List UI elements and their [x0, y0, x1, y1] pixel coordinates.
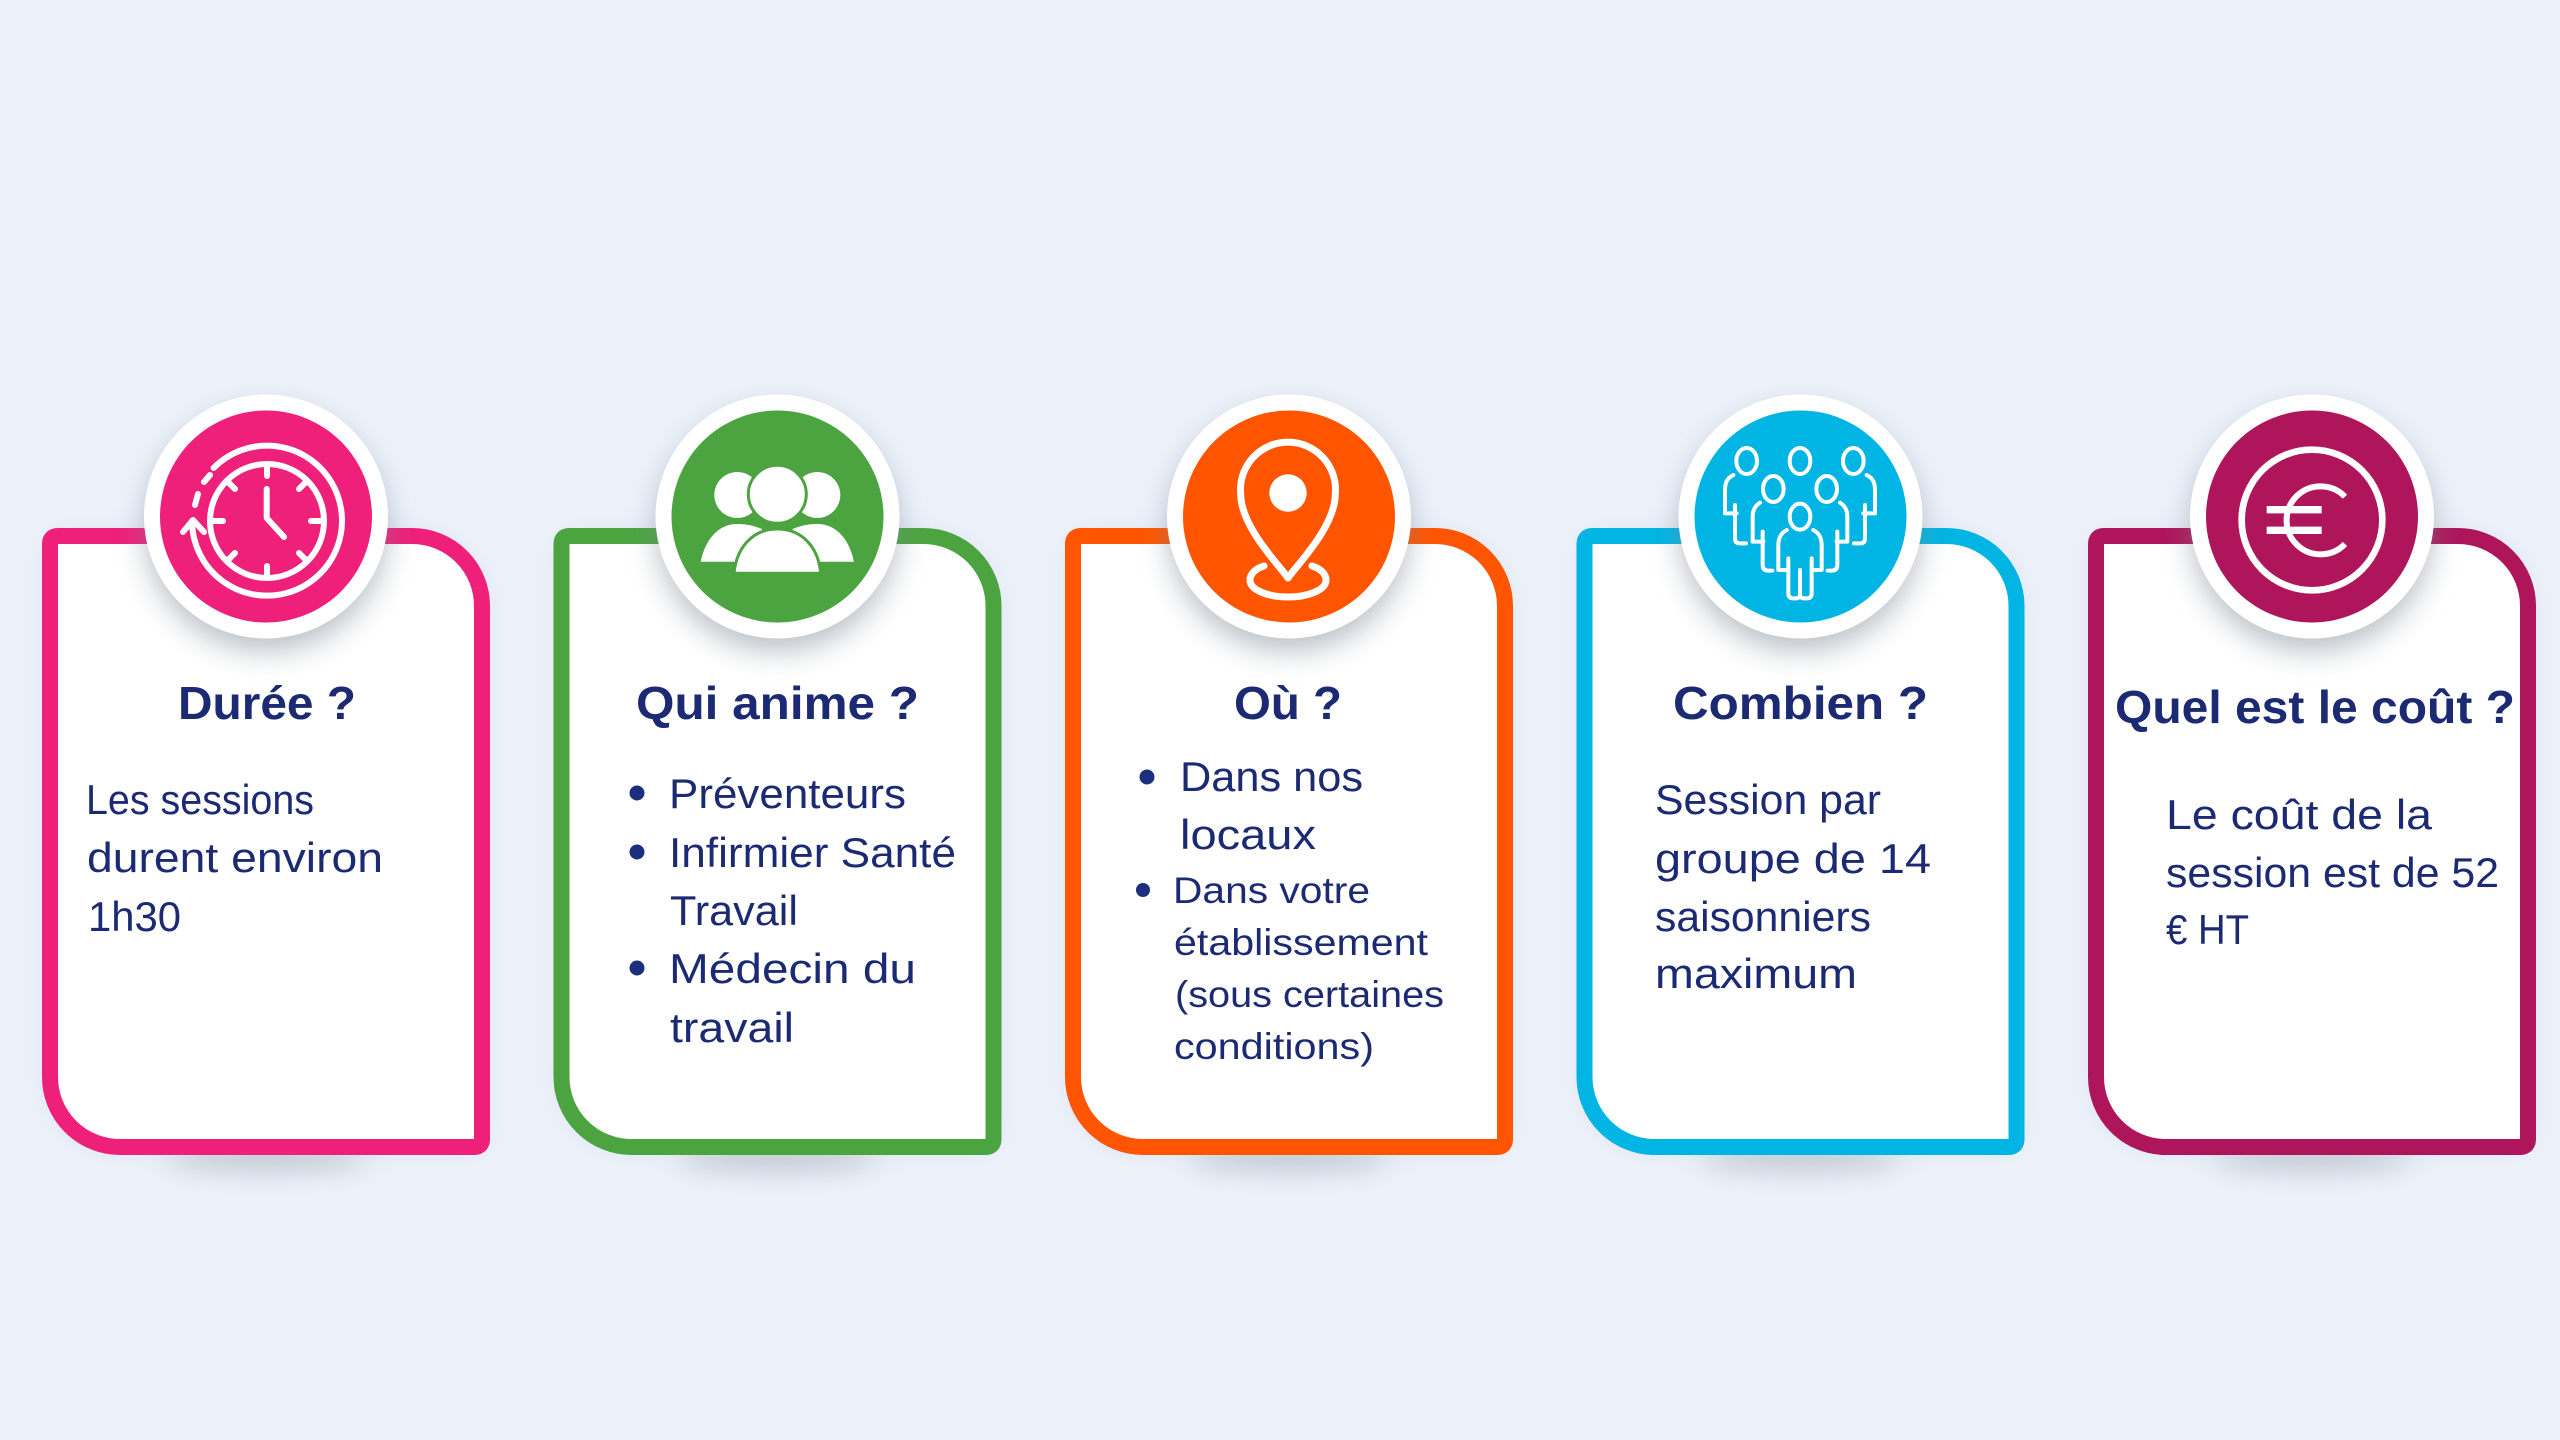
panel: Quel est le coût: [2096, 394, 2528, 1168]
bullet list: Médecin du: [669, 945, 916, 992]
bullet list: conditions): [1174, 1026, 1374, 1067]
bullet list: [1136, 753, 1444, 1067]
bullet list: (sous certaines: [1175, 974, 1444, 1015]
body text: € HT: [2166, 906, 2249, 953]
body text: groupe de 14: [1655, 835, 1931, 882]
icon: euro coin: [2190, 394, 2434, 650]
body text: Session par: [1655, 776, 1881, 823]
bullet list: Dans votre: [1173, 870, 1370, 911]
icon: clock: [144, 394, 388, 650]
panel: Durée: [50, 394, 482, 1168]
body text: durent environ: [87, 834, 383, 881]
body text: Le coût de la: [2166, 791, 2433, 838]
card frame: [2096, 536, 2528, 1168]
panel: Combien: [1584, 394, 2016, 1168]
body text: saisonniers: [1655, 893, 1871, 940]
panel: Où: [1073, 394, 1505, 1168]
bullet list: Préventeurs: [669, 770, 906, 817]
bullet list: locaux: [1180, 811, 1316, 858]
body text: [2166, 791, 2499, 953]
heading: Quel est le coût ?: [2115, 681, 2515, 733]
icon: group of people: [656, 394, 900, 650]
bullet list: [630, 770, 956, 1051]
body text: [86, 776, 383, 940]
body text: Les sessions: [86, 776, 314, 823]
body text: maximum: [1655, 950, 1857, 997]
bullet list: Infirmier Santé: [669, 829, 956, 876]
body text: session est de 52: [2166, 849, 2499, 896]
heading: Qui anime ?: [636, 677, 919, 729]
heading: Où ?: [1234, 677, 1342, 729]
body text: [1655, 776, 1931, 997]
bullet list: établissement: [1174, 922, 1429, 963]
panel: Qui anime: [562, 394, 994, 1168]
icon: location pin: [1167, 394, 1411, 650]
card frame: [50, 536, 482, 1168]
icon: crowd outline: [1678, 394, 1922, 650]
card frame: [1073, 536, 1505, 1168]
body text: 1h30: [88, 893, 181, 940]
heading: Combien ?: [1673, 677, 1928, 729]
bullet list: Dans nos: [1180, 753, 1363, 800]
bullet list: Travail: [670, 887, 798, 934]
bullet list: travail: [670, 1004, 794, 1051]
heading: Durée ?: [178, 677, 356, 729]
card frame: [562, 536, 994, 1168]
card frame: [1584, 536, 2016, 1168]
